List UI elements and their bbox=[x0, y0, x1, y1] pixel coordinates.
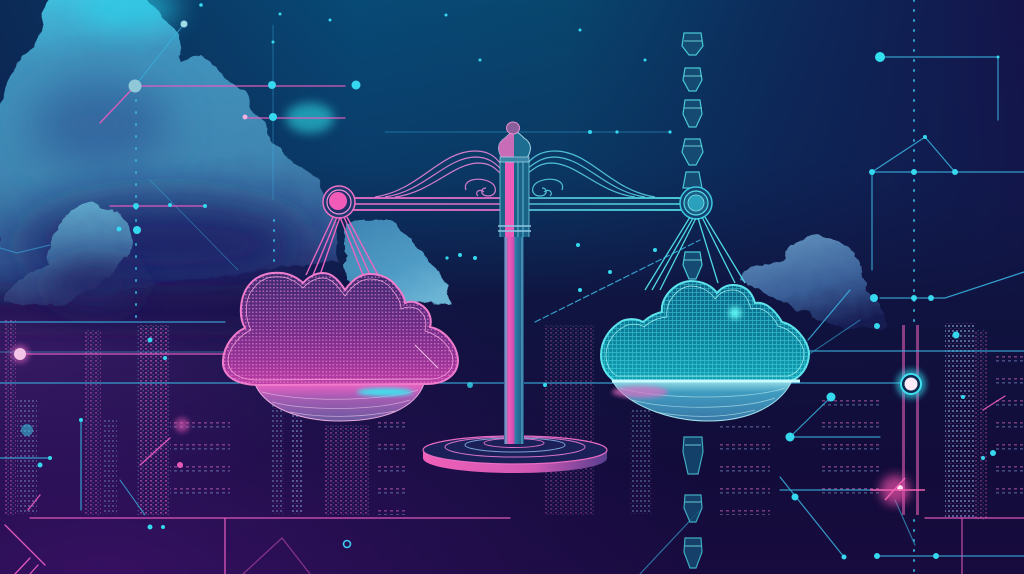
large cloud, upper left bbox=[0, 0, 340, 305]
right pivot bbox=[680, 187, 712, 219]
stand base bbox=[423, 436, 607, 473]
right pan bbox=[601, 217, 809, 421]
glow behind cloud nodes bbox=[286, 103, 334, 133]
right hanger straps bbox=[645, 217, 745, 290]
pillar bbox=[504, 236, 524, 444]
right cloud bbox=[601, 281, 809, 381]
left pivot bbox=[323, 186, 355, 218]
cloud lobe behind left pan bbox=[345, 222, 450, 304]
beam bbox=[352, 198, 684, 210]
data columns, lower background bbox=[4, 320, 1024, 520]
right bowl bbox=[612, 380, 792, 421]
lower left cloud bbox=[2, 203, 140, 308]
left hanger straps bbox=[306, 217, 378, 275]
vertical chain, right side bbox=[682, 33, 703, 568]
scroll ornaments bbox=[375, 151, 655, 197]
pillar top bbox=[498, 122, 531, 237]
cloud on right bbox=[738, 236, 886, 328]
left bowl bbox=[255, 384, 424, 421]
left cloud bbox=[223, 273, 458, 385]
scale stand bbox=[323, 122, 712, 473]
purple haze below clouds bbox=[0, 295, 350, 325]
left pan bbox=[223, 217, 458, 421]
